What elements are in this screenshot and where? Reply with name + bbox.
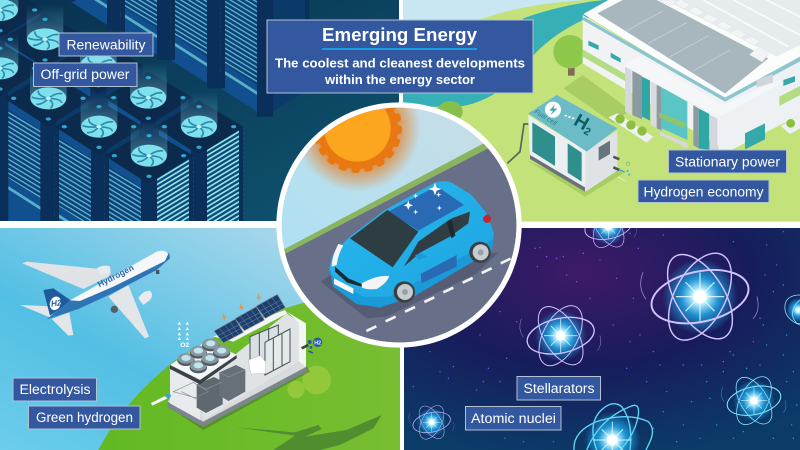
label: Hydrogen economy: Hydrogen economy bbox=[644, 184, 764, 200]
label: Atomic nuclei bbox=[466, 406, 561, 430]
sun bbox=[303, 108, 420, 190]
label: Green hydrogen bbox=[28, 406, 140, 429]
grass verge and road bbox=[284, 144, 516, 342]
power cable bbox=[507, 124, 528, 163]
sparkles on roof bbox=[404, 183, 442, 215]
car shadow bbox=[321, 253, 498, 318]
label: Green hydrogen: Green hydrogen bbox=[36, 410, 133, 425]
title underline bbox=[322, 48, 477, 50]
sky bbox=[403, 0, 586, 20]
plane shadow bbox=[236, 415, 382, 450]
title box bbox=[267, 20, 533, 93]
panel: data centre servers bbox=[0, 0, 399, 221]
label: Atomic nuclei: Atomic nuclei bbox=[471, 411, 556, 426]
label: Off-grid power: Off-grid power bbox=[40, 67, 130, 82]
label: Stellarators bbox=[517, 376, 600, 400]
roof skylights bbox=[659, 0, 769, 62]
hydrogen aeroplane: H2 bbox=[50, 297, 63, 309]
solar car bbox=[329, 181, 494, 307]
fuel cell unit bbox=[527, 95, 630, 197]
label: Electrolysis: Electrolysis bbox=[20, 382, 91, 397]
label: Stationary power bbox=[668, 150, 786, 173]
tree bbox=[553, 35, 587, 76]
bushes bbox=[287, 366, 331, 398]
electrolyser container bbox=[152, 294, 322, 430]
central car circle bbox=[276, 102, 522, 348]
label: Stellarators: Stellarators bbox=[524, 381, 595, 396]
label: Off-grid power bbox=[34, 63, 137, 86]
fuel cell unit: Fuel cell bbox=[533, 108, 558, 128]
road dashes bbox=[366, 259, 511, 331]
atoms bbox=[640, 252, 758, 341]
label: Renewability bbox=[59, 33, 153, 56]
bottom atom cropped by panel bbox=[574, 404, 652, 450]
title text: Emerging Energy bbox=[322, 24, 478, 45]
subtitle text: The coolest and cleanest developments bbox=[275, 56, 525, 70]
fuel cell unit: 2 bbox=[582, 125, 593, 139]
green hill bbox=[98, 302, 400, 450]
planter with bushes bbox=[608, 113, 800, 148]
factory building bbox=[583, 0, 800, 157]
fuel cell unit: H bbox=[571, 109, 593, 134]
building shadow bbox=[563, 75, 630, 123]
panel: hydrogen fuel cell and factory bbox=[400, 0, 800, 222]
electrolyser container: O2 bbox=[180, 342, 189, 349]
subtitle text: within the energy sector bbox=[324, 72, 475, 87]
panel: green hydrogen electrolysis bbox=[0, 228, 400, 450]
electrolyser container: H2 bbox=[314, 340, 321, 346]
label: Renewability: Renewability bbox=[66, 38, 146, 52]
hydrogen aeroplane: Hydrogen bbox=[96, 262, 135, 289]
right atom cropped by panel bbox=[785, 295, 800, 325]
label: Stationary power: Stationary power bbox=[675, 154, 781, 170]
star dots bbox=[413, 232, 783, 442]
hydrogen aeroplane bbox=[20, 251, 170, 338]
panel: atomic nuclei in space bbox=[404, 228, 800, 450]
label: Hydrogen economy bbox=[638, 180, 769, 202]
label: Electrolysis bbox=[13, 378, 96, 401]
bush behind circle bbox=[438, 101, 463, 118]
river bbox=[403, 0, 608, 107]
